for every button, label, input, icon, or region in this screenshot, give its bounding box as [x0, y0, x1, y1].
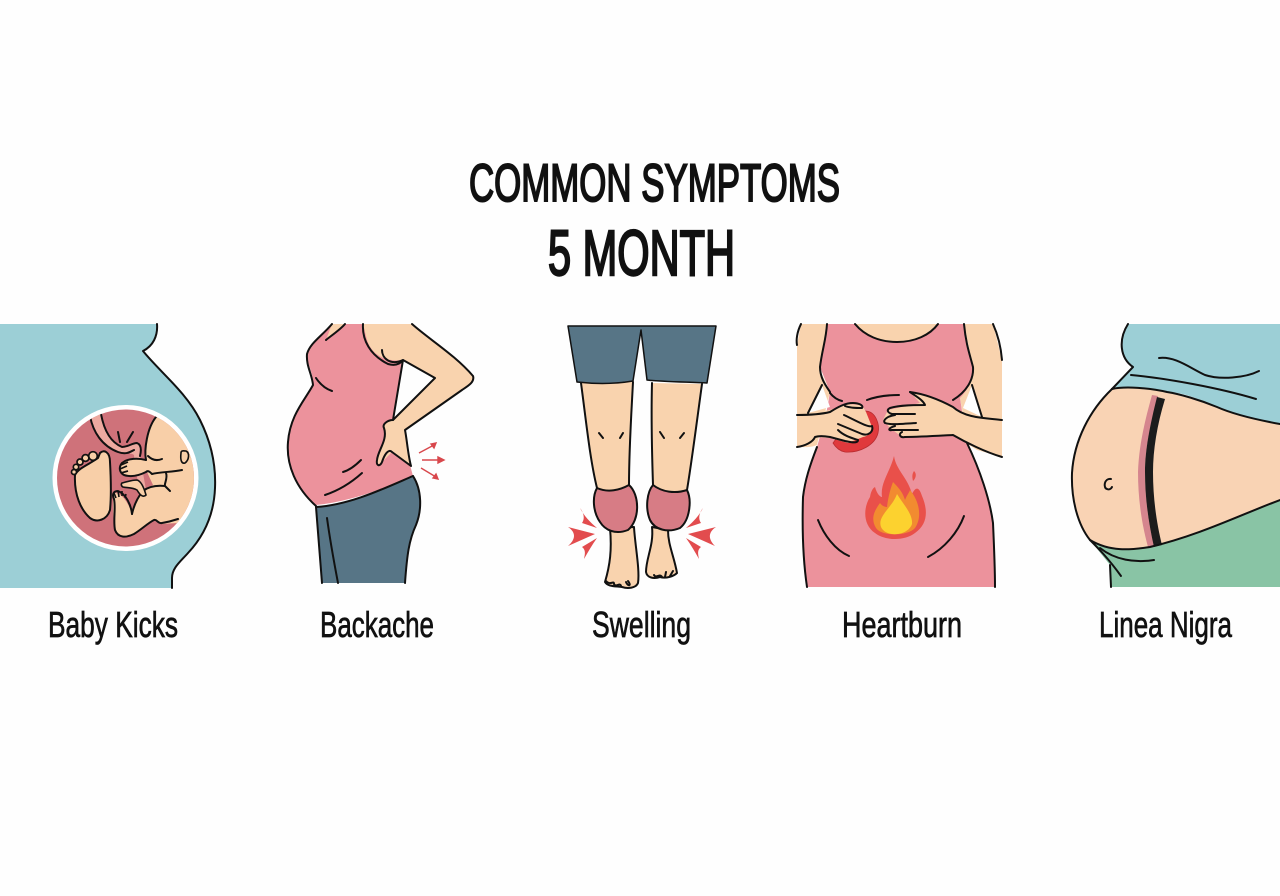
illustration: pregnant belly silhouette: [0, 324, 215, 588]
outlines: heartburn figure: [797, 324, 1002, 587]
icon: flame: [865, 456, 926, 539]
umbilical cord: [91, 414, 146, 488]
label: Linea Nigra: Linea Nigra: [1099, 604, 1233, 645]
illustration: green skirt: [1090, 500, 1280, 587]
fist fingers: [120, 462, 128, 473]
outlines: linea nigra figure: [1072, 324, 1280, 587]
illustration: neck strap: [326, 324, 345, 340]
label: Heartburn: Heartburn: [842, 604, 962, 645]
panel: swelling: [568, 326, 716, 588]
closed eye: [148, 456, 162, 460]
illustration: shorts: [568, 326, 716, 383]
illustration: skin arm and shoulder: [345, 324, 473, 466]
illustration: swollen ankles: [594, 485, 637, 532]
illustration: linea nigra stripe: [1138, 395, 1158, 547]
illustration: right foot: [646, 527, 677, 578]
kick marks: [118, 432, 133, 442]
icon: pain marks: [419, 443, 444, 479]
illustration: neckline: [855, 324, 938, 342]
label: Baby Kicks: Baby Kicks: [48, 604, 178, 645]
knee marks: [599, 432, 684, 438]
outline: belly: [143, 324, 215, 588]
label: Backache: Backache: [320, 604, 434, 645]
ear: [181, 451, 189, 463]
illustration: red stomach: [833, 411, 878, 452]
illustration: white gaps by waist: [808, 385, 982, 417]
illustration: pants: [316, 476, 420, 583]
title: 5 MONTH: [548, 217, 735, 289]
title: COMMON SYMPTOMS: [469, 154, 840, 213]
toe marks: [606, 571, 673, 586]
large foot: [75, 451, 111, 520]
label: Swelling: Swelling: [592, 604, 691, 645]
illustration: belly: [1072, 388, 1280, 549]
icon: right burst marks: [686, 508, 716, 559]
panel: heartburn: [797, 324, 1002, 587]
illustration: right hand: [883, 392, 1002, 457]
panel: linea nigra: [1072, 324, 1280, 587]
title: [469, 154, 840, 289]
panel: backache: [288, 324, 473, 583]
illustration: thighs: [581, 382, 702, 495]
outlines: backache figure: [288, 324, 473, 583]
panel: baby kicks: [0, 324, 215, 588]
illustration: left foot: [605, 527, 638, 588]
illustration: left hand: [797, 404, 872, 447]
illustration: skin shoulders: [797, 324, 1002, 457]
small hand: [121, 480, 146, 496]
illustration: pink dress: [803, 324, 995, 587]
small toes: [114, 491, 126, 498]
baby head and torso: [113, 417, 198, 537]
illustration: womb circle with baby: [52, 405, 198, 551]
illustration: blue top: [1112, 324, 1280, 424]
icon: left burst marks: [568, 508, 597, 559]
illustration: pink tank top: [288, 324, 413, 505]
